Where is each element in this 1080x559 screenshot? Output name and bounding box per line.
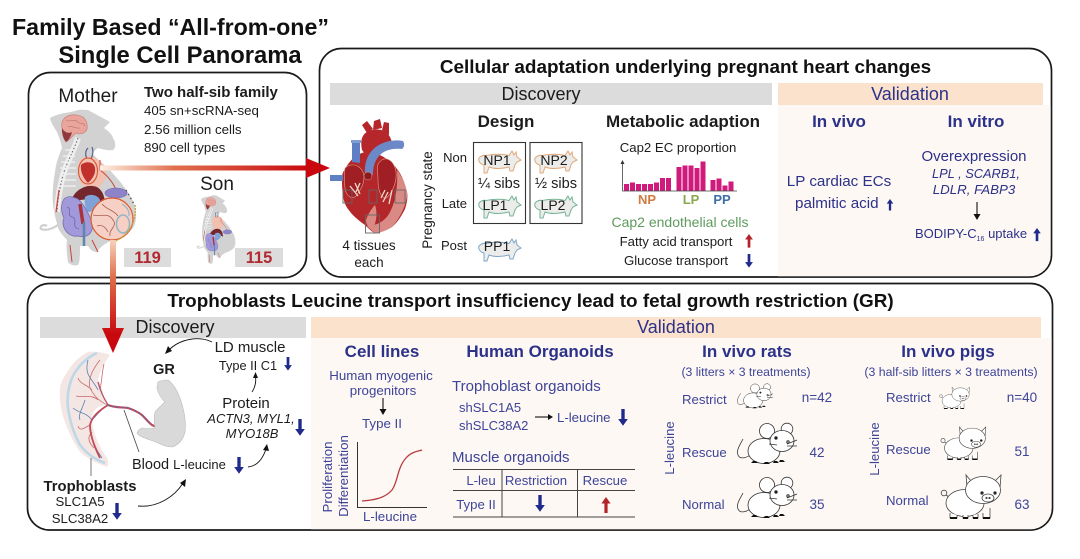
badge: mother 119 [124,248,171,267]
arrow: trophoblast panel link [102,240,124,353]
text: BODIPY uptake: BODIPY-C [915,226,977,241]
pig: PP1: PP1 [484,238,510,254]
text: Type II C1: Type II C1 [219,358,277,373]
box: family 2 [530,142,582,224]
subheading: rats design: (3 litters × 3 treatments) [681,365,811,379]
heading: Cellular adaptation underlying pregnant heart changes [440,57,931,78]
illustration: fetus [137,380,185,447]
text: BODIPY uptake: uptake [984,226,1027,241]
box: family 2: LP2 [541,197,566,213]
row: rat restrict: n=42 [802,390,832,405]
text: Protein genes [206,395,295,441]
text: shRNA: shSLC38A2 [459,418,528,433]
arrow: down [295,419,305,436]
label: glucose transport: Glucose transport [624,253,728,268]
text: type II: Type II [362,416,402,431]
text: shRNA [459,400,528,433]
text: human myogenic progenitors: Human myogenic [329,368,433,383]
arrow: protein to type II [252,372,258,392]
text: human myogenic progenitors: progenitors [350,383,417,398]
text block: two half-sib family: 405 sn+scRNA-seq [144,103,259,118]
arrow: up [1033,228,1041,241]
row: rat normal: 35 [809,497,825,512]
badge: son 115: 115 [246,249,272,267]
table: muscle organoids: L-leu [466,473,496,488]
heading: Trophoblasts Leucine transport insufficiency lead to fetal growth restriction (GR) [167,291,894,312]
label: Cap2 endothelial cells: Cap2 endothelial cells [612,214,748,230]
text: trophoblasts genes: SLC38A2 [52,511,108,526]
title: Single Cell Panorama [58,42,302,69]
box: family 2: NP2 [540,152,568,168]
text: trophoblasts genes: Trophoblasts [44,479,136,495]
label: GR: GR [153,362,175,378]
box: family 1: ¼ sibs [478,176,520,192]
validation header: Validation [637,317,715,337]
table: muscle organoids: Rescue [583,473,627,488]
text block: two half-sib family [144,84,279,155]
discovery header: Discovery [501,84,581,104]
arrow: trophoblasts to blood [138,479,186,506]
icon: heart with four tissues [330,119,407,233]
arrow: down [618,409,628,426]
row: pig normal: 63 [1014,497,1030,512]
text: L-leucine: L-leucine [557,410,611,425]
title: Family Based “All-from-one” [12,14,329,40]
text: human myogenic progenitors [329,368,433,398]
heading: cell lines: Cell lines [345,342,419,361]
row: rat rescue: 42 [809,445,825,460]
text: shRNA: shSLC1A5 [459,400,521,415]
arrow: blood to protein [248,444,269,467]
row labels: Non [443,150,467,165]
label: fatty acid transport: Fatty acid transport [620,234,733,249]
row: pig normal: Normal [886,493,929,508]
line chart: proliferation vs L-leucine: Proliferation [320,442,335,512]
icon: mother pig anatomy [41,110,136,265]
heading: in vitro: In vitro [948,112,1004,131]
arrow: overexpression to uptake [974,202,980,220]
illustration: placenta and umbilical cord [60,352,162,467]
validation header [311,317,1041,338]
leader line: trophoblast cord [124,410,139,452]
table: muscle organoids [453,470,635,517]
arrow: down [234,457,244,474]
icon: son pig anatomy [197,195,235,264]
row: pig rescue [886,427,1030,460]
text: overexpression genes [921,148,1027,197]
panel: trophoblasts [28,284,1052,530]
label: 4 tissues each: 4 tissues [342,238,396,253]
table: muscle organoids: Restriction [505,473,567,488]
discovery header: Discovery [135,317,215,337]
axis label: pregnancy state: Pregnancy state [420,151,435,249]
text block: two half-sib family: 890 cell types [144,140,226,155]
row: rat restrict [682,384,832,408]
arrow: down [112,503,122,520]
text: LP cardiac ECs: LP cardiac ECs [787,173,892,190]
text: Protein genes: MYO18B [226,426,279,441]
arrow: heart panel link [100,158,330,178]
badge: son 115 [235,248,283,267]
arrow: LD muscle to GR [165,339,212,354]
axis label: L-leucine rats: L-leucine [662,421,677,475]
row: pig rescue: Rescue [886,442,931,457]
text: trophoblast organoids: Trophoblast organoids [452,378,601,395]
left panel: family [28,72,306,278]
row: pig normal [886,475,1030,519]
text: muscle organoids: Muscle organoids [452,449,570,466]
arrow: shRNA to L-leucine [535,414,553,420]
label: 4 tissues each [342,238,396,270]
row: pig rescue: 51 [1014,444,1030,459]
heading: design: Design [478,112,534,131]
bar chart: Cap2 EC proportion: LP [683,192,700,207]
text block: two half-sib family: Two half-sib family [144,84,279,101]
validation header: Validation [871,84,949,104]
heading: in vivo: In vivo [812,112,866,131]
bar chart: Cap2 EC proportion: PP [713,192,731,207]
label: 4 tissues each: each [354,255,384,270]
row: pig restrict: Restrict [886,390,931,405]
row: pig restrict: n=40 [1007,390,1037,405]
text: Protein genes: ACTN3, MYL1, [206,411,295,426]
label: Mother: Mother [58,86,118,107]
text: BODIPY uptake: 16 [977,236,985,243]
subheading: pigs design: (3 half-sib litters × 3 treatments) [864,365,1038,379]
row: rat rescue: Rescue [682,445,727,460]
text: overexpression genes: LPL , SCARB1, [932,166,1020,181]
row: rat rescue [682,423,825,464]
box: family 1: NP1 [483,152,511,168]
title [12,14,329,69]
text: overexpression genes: Overexpression [921,148,1027,165]
line chart: proliferation vs L-leucine: Differentiation [336,435,351,517]
pig: PP1 [479,238,521,261]
text: trophoblasts genes: SLC1A5 [55,494,105,509]
text: overexpression genes: LDLR, FABP3 [933,182,1016,197]
validation header [778,83,1043,105]
axis label: L-leucine pigs: L-leucine [867,422,882,476]
discovery header [40,317,306,338]
line chart: proliferation vs L-leucine: L-leucine [363,509,417,524]
bar chart: Cap2 EC proportion: NP [638,192,656,207]
bar chart: Cap2 EC proportion [620,160,737,207]
label: Cap2 EC proportion: Cap2 EC proportion [620,140,736,155]
arrow: up [745,234,753,248]
box: family 1 [474,142,526,224]
text block: two half-sib family: 2.56 million cells [144,122,242,137]
row: pig restrict [886,387,1037,409]
validation background [311,338,1052,529]
text: LD muscle: LD muscle [215,339,285,356]
line chart: proliferation vs L-leucine [320,435,427,524]
box: family 1: LP1 [483,197,508,213]
text: blood L-leucine: Blood L-leucine [132,457,226,473]
text: trophoblasts genes [44,479,136,526]
arrow: down [745,254,753,268]
row labels [441,150,467,253]
validation background [778,105,1051,276]
text: Protein genes: Protein [222,395,270,412]
arrow: up [887,199,893,211]
arrow: down [284,357,292,371]
badge: mother 119: 119 [134,249,161,267]
heading: in vivo pigs: In vivo pigs [901,342,995,361]
label: Son: Son [200,174,234,195]
leader line: placenta to trophoblasts [90,458,92,476]
heading: in vivo rats: In vivo rats [702,342,792,361]
table: muscle organoids: Type II [456,497,496,512]
discovery header [330,83,772,105]
row: rat normal [682,477,825,518]
row: rat restrict: Restrict [682,392,727,407]
heading: metabolic adaption: Metabolic adaption [606,112,760,131]
row labels: Late [442,196,467,211]
row: rat normal: Normal [682,497,725,512]
box: family 2: ½ sibs [535,176,577,192]
heading: human organoids: Human Organoids [466,342,614,361]
text: palmitic acid: palmitic acid [795,195,879,212]
panel: cellular adaptation [320,48,1052,277]
row labels: Post [441,238,467,253]
arrow: progenitors to type II [380,398,386,415]
